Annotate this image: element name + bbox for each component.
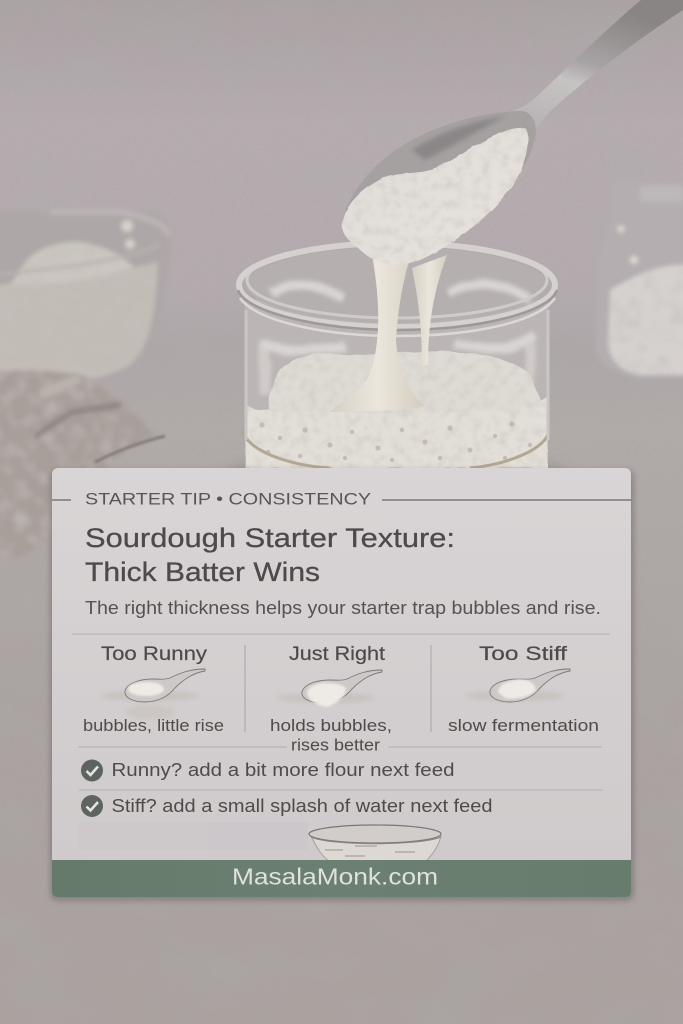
icon: check	[81, 760, 103, 782]
upper starter in jar	[247, 351, 546, 440]
column: just right: Just Right	[289, 644, 386, 665]
subtitle: The right thickness helps your starter trap bubbles and rise.	[85, 598, 601, 618]
card panel	[52, 468, 631, 897]
column: just right: holds bubbles,	[270, 717, 392, 735]
icon: glass bowl illustration	[309, 825, 441, 862]
spoon handle	[505, 0, 683, 130]
footer bar	[52, 860, 631, 897]
column: too runny: bubbles, little rise	[83, 717, 224, 735]
title: Thick Batter Wins	[85, 557, 320, 587]
icon: spoon with stiff starter	[465, 669, 570, 702]
column: too runny: Too Runny	[101, 644, 208, 665]
inner back of jar	[247, 247, 547, 323]
eyebrow rule	[52, 499, 631, 501]
batter drips	[330, 255, 425, 412]
title	[85, 523, 455, 587]
column: too stiff: slow fermentation	[448, 717, 599, 735]
jar body glass	[245, 300, 548, 468]
glass smears	[262, 285, 535, 395]
icon: check	[81, 795, 103, 817]
tip: stiff: Stiff? add a small splash of water next feed	[112, 796, 492, 816]
jar rim	[238, 242, 557, 440]
column: too runny	[83, 644, 224, 735]
blurred jar on the right	[596, 182, 683, 378]
jar rubber band	[243, 430, 549, 468]
column: just right	[270, 644, 392, 754]
title: Sourdough Starter Texture:	[85, 523, 455, 553]
glass jar with starter	[227, 242, 567, 484]
batter in spoon	[343, 128, 529, 265]
footer brand: MasalaMonk.com	[232, 864, 438, 890]
card shadow	[50, 470, 634, 901]
dense starter layer with bubbles	[246, 395, 548, 468]
blurred glass bowl on the left	[0, 212, 172, 382]
column: too stiff: Too Stiff	[479, 644, 568, 665]
icon: spoon with runny starter	[100, 669, 205, 719]
icon: spoon with thick starter	[276, 670, 382, 707]
info card	[50, 468, 634, 901]
spoon lifting starter	[343, 0, 683, 265]
tip: runny: Runny? add a bit more flour next feed	[112, 760, 455, 780]
column: just right: rises better	[291, 736, 381, 754]
blurred linen cloth	[0, 370, 165, 558]
eyebrow: STARTER TIP • CONSISTENCY	[85, 490, 371, 508]
spoon bowl	[344, 111, 536, 258]
jar shadow	[227, 456, 567, 484]
faint band behind bowl	[78, 822, 308, 850]
column: too stiff	[448, 644, 599, 735]
